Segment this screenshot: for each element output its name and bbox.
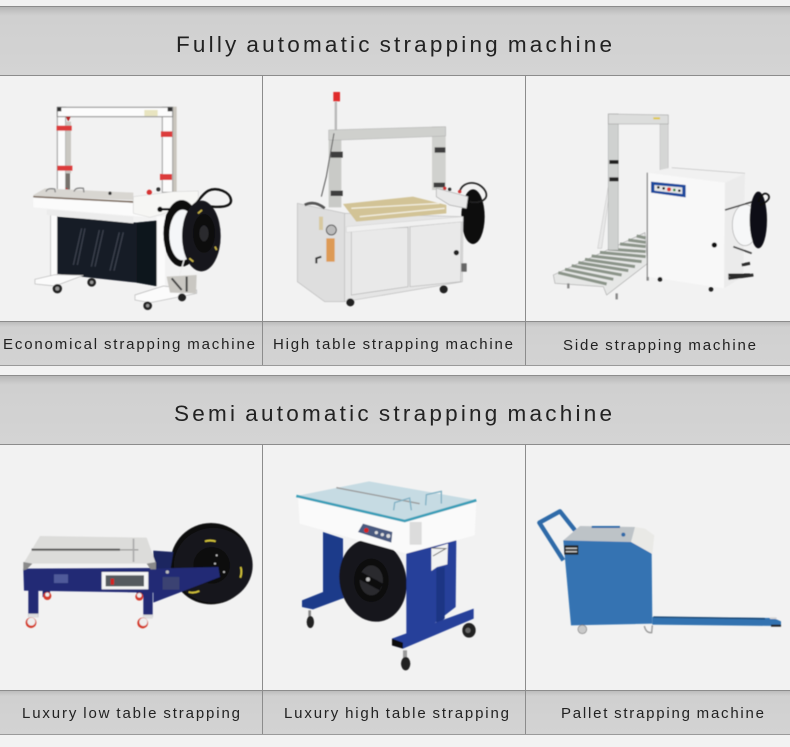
machine: side strapping machine (553, 114, 769, 299)
section: semi automatic strapping machines (0, 375, 790, 735)
label band row 1 (0, 76, 790, 366)
label: pallet strapping machine: Pallet strapping machine (561, 705, 764, 722)
machine: pallet strapping machine (539, 511, 781, 634)
section: fully automatic strapping machines (0, 6, 790, 366)
machine: high table strapping machine (297, 92, 486, 306)
heading band: fully automatic: Fully automatic strapping machine (176, 32, 612, 57)
heading band: semi automatic (0, 375, 790, 445)
heading band: fully automatic (0, 6, 790, 76)
label: luxury high table strapping: Luxury high table strapping (284, 705, 509, 722)
label: side strapping machine: Side strapping machine (563, 337, 756, 354)
heading band: semi automatic: Semi automatic strapping machine (174, 401, 612, 426)
label: high table strapping machine: High table strapping machine (273, 336, 513, 353)
machine: luxury high table strapping (296, 481, 476, 670)
machine: luxury low table strapping (23, 523, 253, 628)
label: economical strapping machine: Economical strapping machine (3, 336, 255, 353)
machine: economical strapping machine (33, 107, 231, 310)
label: luxury low table strapping: Luxury low table strapping (22, 705, 240, 722)
label band row 2 (0, 445, 790, 735)
